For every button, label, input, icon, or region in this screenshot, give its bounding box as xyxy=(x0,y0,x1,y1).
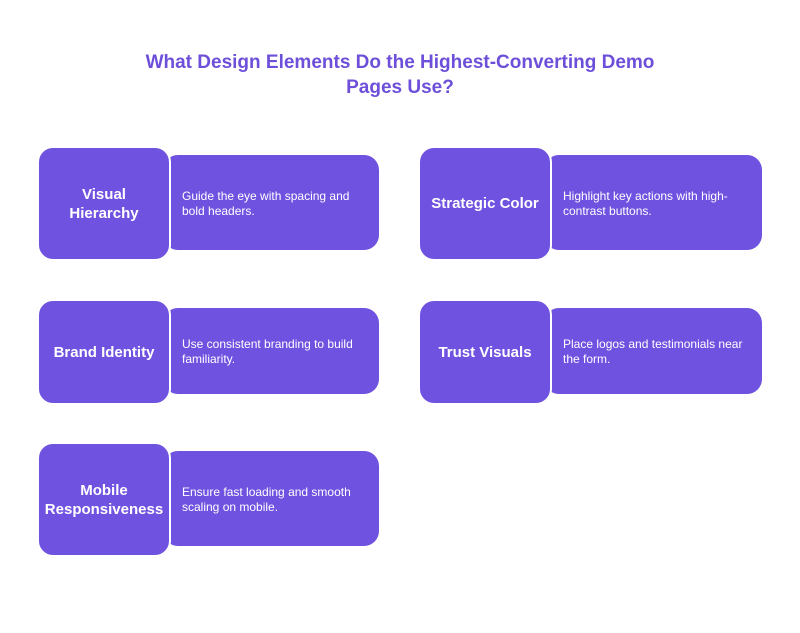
title: What Design Elements Do the Highest-Converting Demo xyxy=(146,52,654,73)
description xyxy=(163,451,379,546)
label: Visual xyxy=(82,186,126,202)
description: Ensure fast loading and smooth scaling on mobile. xyxy=(182,485,351,514)
title xyxy=(146,52,654,98)
card: mobile responsiveness xyxy=(39,444,379,555)
label xyxy=(37,146,171,261)
title: Pages Use? xyxy=(346,77,454,98)
description: Place logos and testimonials near the form. xyxy=(563,337,742,366)
label: Responsiveness xyxy=(45,500,163,518)
label: Trust Visuals xyxy=(438,344,532,360)
card: brand identity xyxy=(39,301,379,403)
label: Hierarchy xyxy=(69,204,139,222)
label xyxy=(37,299,171,405)
label xyxy=(37,442,171,557)
description xyxy=(163,308,379,394)
label xyxy=(418,146,552,261)
card: strategic color xyxy=(420,148,762,259)
description: Highlight key actions with high-contrast buttons. xyxy=(563,189,728,218)
label: Brand Identity xyxy=(54,344,154,360)
label xyxy=(418,299,552,405)
description xyxy=(163,155,379,250)
description xyxy=(544,155,762,250)
description: Guide the eye with spacing and bold headers. xyxy=(182,189,349,218)
label: Mobile xyxy=(80,482,128,498)
description xyxy=(544,308,762,394)
label: Strategic Color xyxy=(431,195,539,212)
description: Use consistent branding to build familiarity. xyxy=(182,337,353,366)
card: visual hierarchy xyxy=(39,148,379,259)
card: trust visuals xyxy=(420,301,762,403)
